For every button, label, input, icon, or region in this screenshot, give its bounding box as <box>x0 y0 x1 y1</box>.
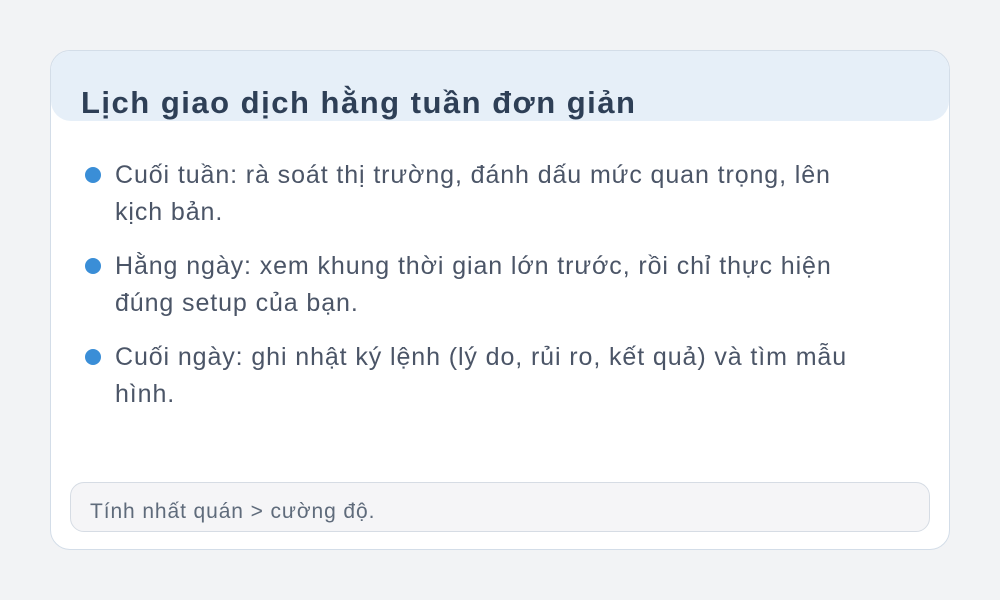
panel: card <box>50 50 950 550</box>
bullet: weekend: Cuối tuần: rà soát thị trường, đánh dấu mức quan trọng, lên <box>115 161 831 189</box>
bullet: end of day: hình. <box>115 380 175 408</box>
footer callout: Tính nhất quán > cường độ. <box>90 500 375 523</box>
bullet: end of day: Cuối ngày: ghi nhật ký lệnh (lý do, rủi ro, kết quả) và tìm mẫu <box>115 343 847 371</box>
bullet: daily <box>85 252 832 317</box>
title: Lịch giao dịch hằng tuần đơn giản <box>81 85 636 120</box>
footer callout <box>70 482 930 532</box>
bullet: weekend: kịch bản. <box>115 198 223 226</box>
bullet: daily: Hằng ngày: xem khung thời gian lớn trước, rồi chỉ thực hiện <box>115 252 832 280</box>
bullet: daily: đúng setup của bạn. <box>115 289 359 317</box>
header band <box>51 51 949 121</box>
bullet: weekend <box>85 161 831 226</box>
bullet: end of day <box>85 343 847 408</box>
